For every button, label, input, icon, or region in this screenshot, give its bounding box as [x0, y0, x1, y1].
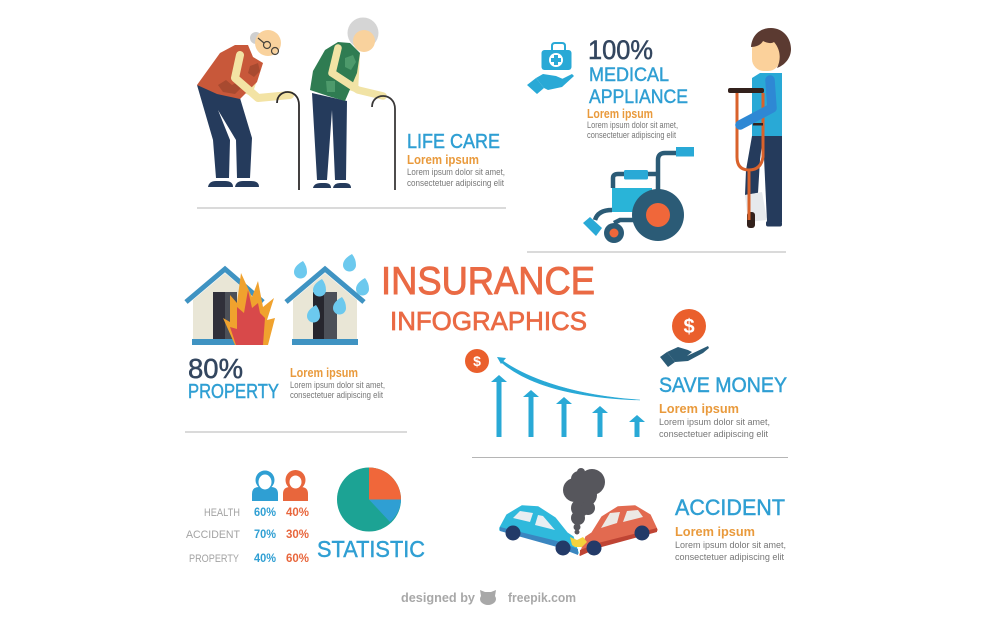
text block: life care: Lorem ipsum dolor sit amet, — [407, 167, 505, 177]
text block: save money — [659, 374, 787, 439]
panel: statistic table — [186, 470, 309, 565]
title — [381, 260, 595, 336]
text block: medical appliance: Lorem ipsum dolor sit amet, — [587, 120, 678, 130]
icon: female user — [283, 470, 308, 501]
icon: male user — [252, 470, 278, 501]
text block: medical appliance: consectetuer adipiscing elit — [587, 130, 676, 140]
illustration: elderly woman with cane — [310, 18, 395, 190]
text block: accident: ACCIDENT — [675, 495, 785, 520]
text block: medical appliance: APPLIANCE — [589, 87, 688, 108]
text block: save money: Lorem ipsum — [659, 402, 739, 416]
panel: statistic table: PROPERTY — [189, 553, 240, 565]
text block: life care: LIFE CARE — [407, 131, 500, 153]
title: INFOGRAPHICS — [390, 306, 587, 336]
text block: property: 80% — [188, 353, 243, 384]
icon: coin over hand: $ — [683, 316, 695, 338]
chart: descending cost arrows: $ — [473, 353, 481, 369]
illustration: flooded house with drops — [286, 254, 369, 345]
text block: life care — [407, 131, 505, 188]
chart: pie — [337, 468, 401, 532]
illustration: house on fire — [186, 269, 275, 345]
icon: medical kit on hand — [527, 43, 574, 94]
chart: descending cost arrows — [465, 349, 645, 437]
text block: life care: Lorem ipsum — [407, 153, 479, 167]
illustration: person on crutches — [728, 28, 791, 228]
illustration: wheelchair — [583, 147, 694, 243]
panel: statistic table: 60% — [254, 505, 276, 519]
panel: statistic table: 60% — [286, 551, 309, 565]
panel: statistic table: 70% — [254, 527, 276, 541]
footer: freepik credit — [401, 590, 576, 605]
text block: property: PROPERTY — [188, 381, 279, 403]
text block: life care: consectetuer adipiscing elit — [407, 178, 504, 188]
panel: statistic table: 40% — [286, 505, 309, 519]
heading: statistic: STATISTIC — [317, 536, 425, 562]
crash spark — [570, 537, 587, 547]
text block: save money: consectetuer adipiscing elit — [659, 429, 769, 439]
text block: medical appliance: MEDICAL — [589, 65, 669, 86]
text block: property — [188, 353, 385, 403]
title: INSURANCE — [381, 260, 595, 303]
text block: medical appliance: 100% — [588, 35, 653, 65]
panel: statistic table: ACCIDENT — [186, 529, 240, 541]
blue car — [500, 506, 578, 556]
illustration: car crash with smoke — [500, 468, 657, 556]
text block: property: consectetuer adipiscing elit — [290, 390, 383, 400]
text block: medical appliance — [587, 35, 688, 140]
text block: accident: Lorem ipsum — [675, 525, 755, 539]
text block: accident — [675, 495, 786, 562]
illustration: elderly man with cane — [197, 30, 299, 190]
panel: statistic table: 40% — [254, 551, 276, 565]
footer: freepik credit: designed by — [401, 590, 476, 605]
panel: statistic table: 30% — [286, 527, 309, 541]
text block: save money: SAVE MONEY — [659, 374, 787, 397]
red car — [580, 506, 657, 556]
text block: property: Lorem ipsum dolor sit amet, — [290, 380, 385, 390]
smoke cloud — [563, 468, 605, 534]
text block: accident: consectetuer adipiscing elit — [675, 552, 785, 562]
panel: statistic table: HEALTH — [204, 507, 240, 519]
footer: freepik credit: freepik.com — [508, 590, 576, 605]
text block: medical appliance: Lorem ipsum — [587, 107, 653, 121]
text block: accident: Lorem ipsum dolor sit amet, — [675, 540, 786, 550]
text block: property: Lorem ipsum — [290, 366, 358, 380]
text block: save money: Lorem ipsum dolor sit amet, — [659, 417, 770, 427]
icon: coin over hand — [660, 309, 709, 367]
